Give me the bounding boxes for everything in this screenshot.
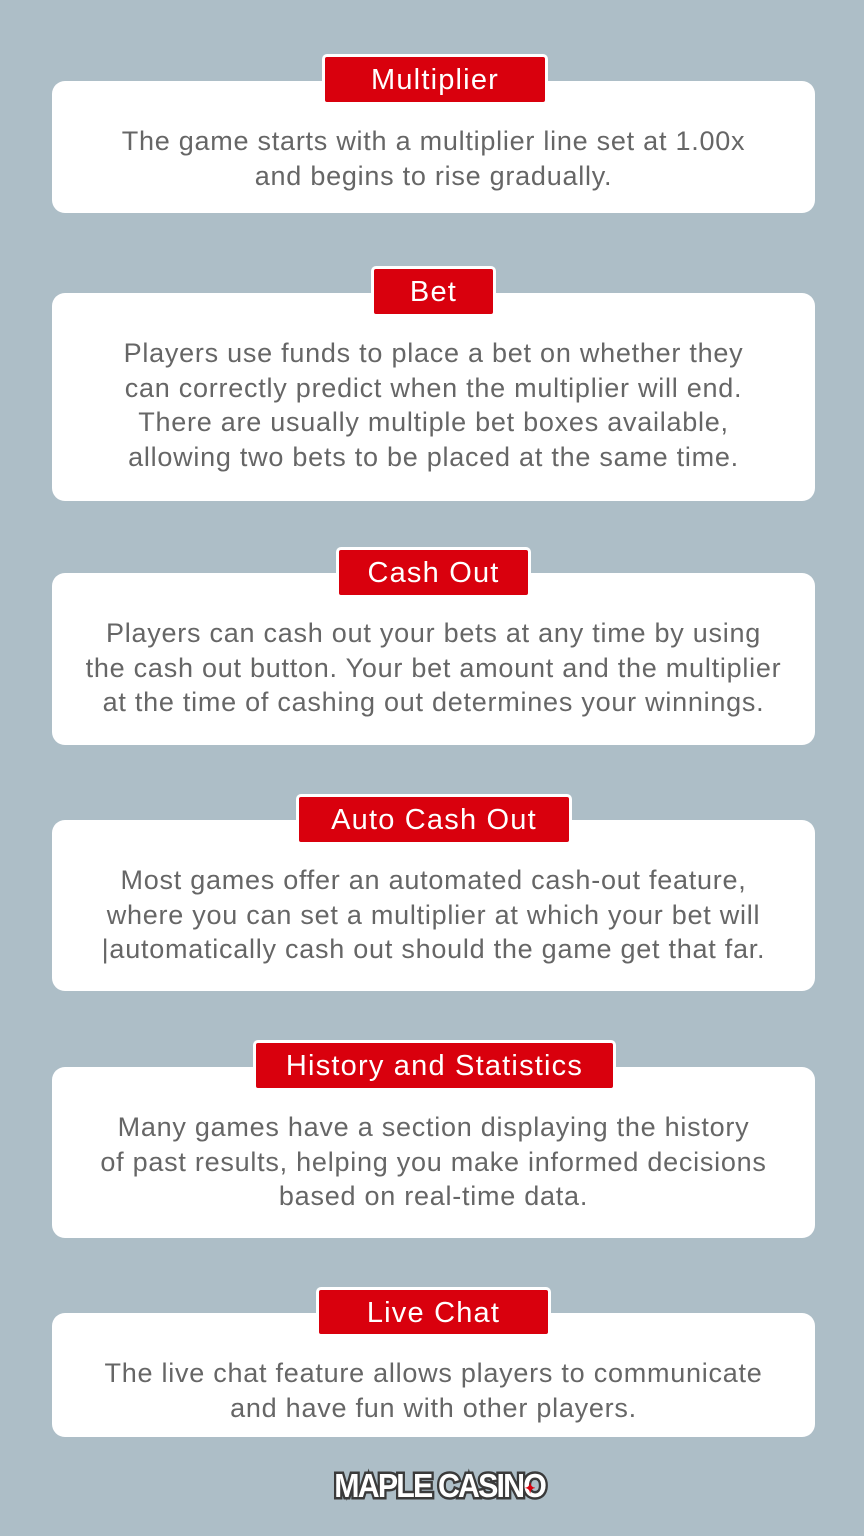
text: auto cash out: |automatically cash out should the game get that far. [102,934,765,964]
text: multiplier: and begins to rise gradually. [255,160,612,190]
text: bet [124,338,743,472]
panel: live chat [52,1313,815,1437]
label: Live Chat: Live Chat [367,1297,500,1329]
text: cash out [86,618,781,717]
label: History and Statistics [253,1040,616,1091]
text: history [100,1112,767,1211]
text: bet: There are usually multiple bet boxes available, [138,407,729,437]
text: cash out: the cash out button. Your bet amount and the multiplier [86,652,781,682]
text: multiplier [122,126,745,190]
label: Auto Cash Out: Auto Cash Out [331,804,537,836]
text: cash out: Players can cash out your bets at any time by using [106,618,761,648]
label: Auto Cash Out [296,794,572,845]
label: Bet: Bet [410,276,457,308]
panel: history [52,1067,815,1238]
label: Bet [371,266,496,317]
text: history: Many games have a section displaying the history [118,1112,749,1142]
label: Multiplier [322,54,548,105]
text: history: based on real-time data. [279,1181,588,1211]
text: live chat [104,1358,763,1422]
label: Live Chat [316,1287,551,1337]
label: Cash Out [336,547,531,598]
label: Multiplier: Multiplier [371,64,499,96]
panel: cash out [52,573,815,745]
logo: Maple Casino: MAPLE CASINO✦ [334,1467,545,1504]
label: History and Statistics: History and Statistics [286,1050,583,1082]
text: auto cash out: where you can set a multiplier at which your bet will [107,900,760,930]
text: bet: allowing two bets to be placed at the same time. [128,442,739,472]
text: cash out: at the time of cashing out determines your winnings. [103,687,764,717]
text: live chat: and have fun with other players. [230,1392,637,1422]
label: Cash Out: Cash Out [367,557,500,589]
text: history: of past results, helping you make informed decisions [100,1146,767,1176]
panel: auto cash out [52,820,815,991]
text: bet: Players use funds to place a bet on whether they [124,338,743,368]
text: bet: can correctly predict when the multiplier will end. [125,372,742,402]
panel: multiplier [52,81,815,213]
text: live chat: The live chat feature allows players to communicate [104,1358,763,1388]
panel: bet [52,293,815,501]
text: auto cash out [102,865,765,964]
text: auto cash out: Most games offer an automated cash-out feature, [120,865,747,895]
text: multiplier: The game starts with a multiplier line set at 1.00x [122,126,745,156]
